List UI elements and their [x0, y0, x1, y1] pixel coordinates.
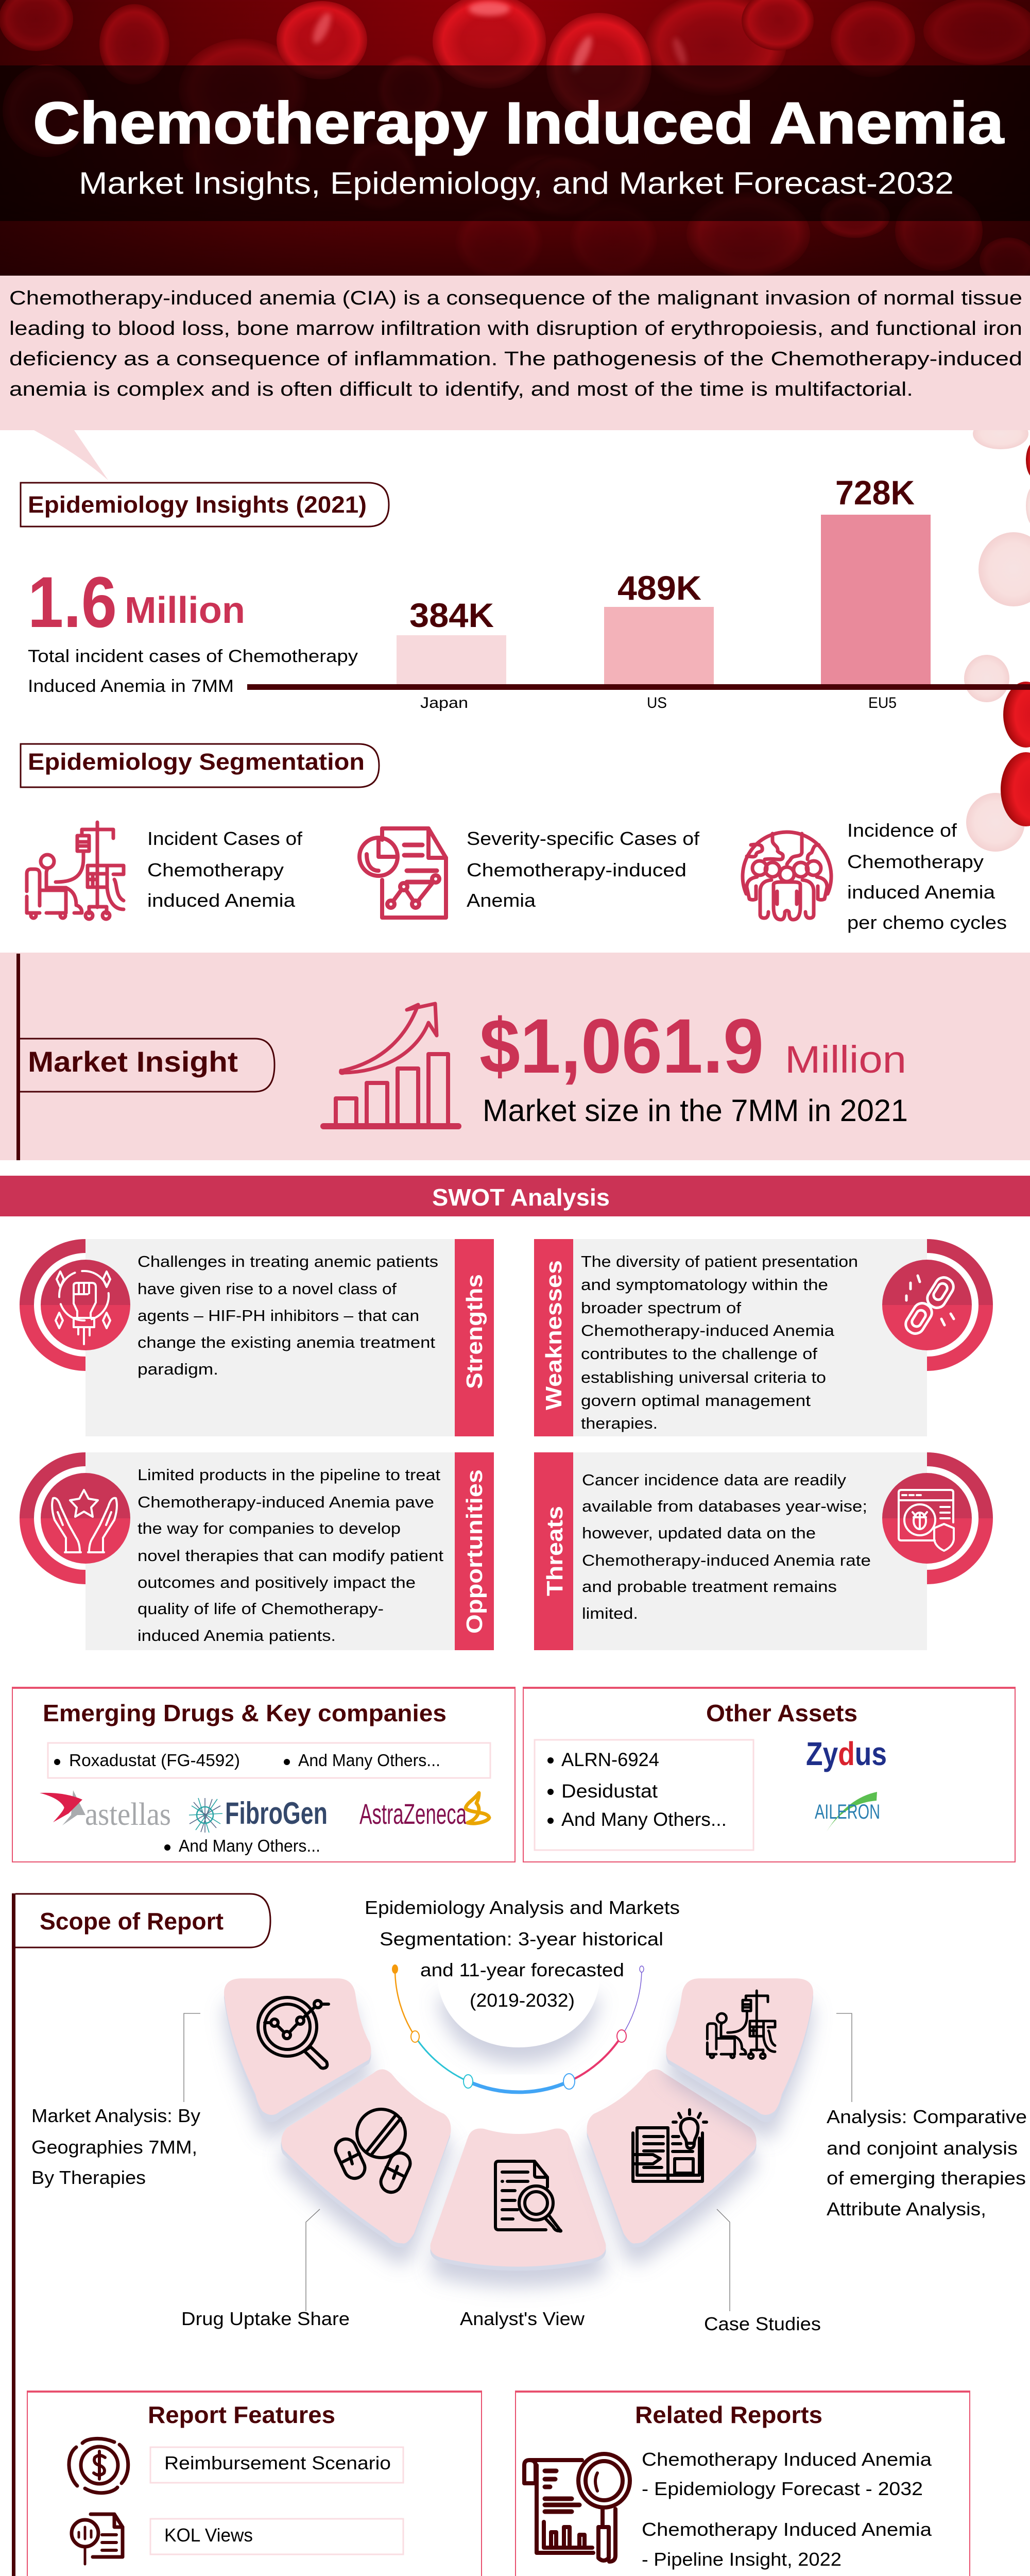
strengths text: Challenges in treating anemic patients: [138, 1252, 438, 1270]
drug list box: Roxadustat (FG-4592): [69, 1751, 240, 1770]
segment: severity-specific: [359, 828, 700, 918]
panel: market insight: Market size in the 7MM in 2021: [483, 1093, 908, 1128]
text: epidemiology analysis: Epidemiology Analysis and Markets: [365, 1897, 680, 1918]
weaknesses text: contributes to the challenge of: [581, 1345, 817, 1363]
panel: opportunities: Opportunities: [462, 1469, 487, 1634]
market size value: $1,061.9: [479, 1003, 764, 1089]
strengths text: paradigm.: [138, 1360, 218, 1378]
text: market analysis: By Therapies: [31, 2167, 146, 2188]
weaknesses text: The diversity of patient presentation: [581, 1252, 858, 1270]
dark title band: [0, 65, 1030, 221]
related report titles: - Pipeline Insight, 2022: [642, 2549, 842, 2570]
intro text: deficiency as a consequence of inflammation. The pathogenesis of the Chemotherapy-induced: [9, 348, 1022, 370]
heading: Related Reports: [635, 2401, 822, 2428]
text: drug uptake share: Drug Uptake Share: [181, 2308, 350, 2329]
opportunities text: Limited products in the pipeline to treat: [138, 1466, 440, 1484]
segment: incidence per chemo cycles: Incidence of: [847, 820, 957, 841]
related report titles: Chemotherapy Induced Anemia: [642, 2449, 932, 2470]
text: market analysis: [31, 2105, 200, 2188]
segment: severity-specific: Chemotherapy-induced: [467, 859, 686, 880]
segment: incident cases: [27, 822, 303, 919]
KOL box: KOL Views: [164, 2524, 253, 2546]
panel: weaknesses: [534, 1239, 993, 1436]
connector lines: [184, 2013, 852, 2311]
text: comparative analysis: Attribute Analysis,: [827, 2198, 986, 2219]
text: market analysis: Geographies 7MM,: [31, 2137, 197, 2158]
logo: FibroGen: [189, 1796, 328, 1833]
icon: book with lightbulb: [633, 2110, 707, 2181]
heading: Report Features: [148, 2401, 335, 2428]
stat: 1.6 Million: [28, 562, 358, 696]
text: epidemiology analysis: Segmentation: 3-year historical: [380, 1928, 663, 1950]
weaknesses text: and symptomatology within the: [581, 1276, 828, 1294]
text: market analysis: Market Analysis: By: [31, 2105, 200, 2126]
petal: comparative analysis: [666, 1978, 813, 2122]
segment: incident cases: induced Anemia: [147, 890, 296, 911]
opportunities text: Chemotherapy-induced Anemia pave: [138, 1493, 434, 1511]
icon: computer bug and shield: [899, 1490, 954, 1551]
icon: chemo chair and IV: [706, 1990, 777, 2060]
intro text: [9, 287, 1022, 400]
petal: market analysis: [224, 1978, 371, 2122]
icon: fist: [56, 1271, 110, 1344]
weaknesses text: govern optimal management: [581, 1392, 811, 1410]
text: epidemiology analysis: (2019-2032): [470, 1990, 575, 2011]
segment: severity-specific: Severity-specific Cases of: [467, 828, 700, 849]
logo: FibroGen: FibroGen: [225, 1796, 328, 1831]
bar chart: 489K: [617, 569, 701, 607]
text: comparative analysis: Analysis: Comparative: [827, 2106, 1027, 2127]
opportunities text: induced Anemia patients.: [138, 1626, 336, 1645]
logo: astellas: astellas: [85, 1797, 171, 1832]
icon: pills: [332, 2109, 414, 2196]
weaknesses text: therapies.: [581, 1414, 658, 1432]
text: comparative analysis: of emerging therapies: [827, 2167, 1026, 2189]
panel: strengths: Strengths: [462, 1274, 487, 1389]
panel: related reports: [515, 2391, 970, 2576]
related report titles: Chemotherapy Induced Anemia: [642, 2519, 932, 2540]
logo: AstraZeneca: AstraZeneca: [359, 1798, 467, 1830]
icon: chemo chair and IV: [25, 820, 126, 921]
reimbursement box: [150, 2447, 403, 2483]
assets list box: And Many Others...: [561, 1809, 727, 1830]
threats text: Cancer incidence data are readily: [582, 1471, 847, 1489]
heading: Emerging Drugs & Key companies: [43, 1700, 447, 1726]
related report titles: [642, 2449, 932, 2570]
bar chart: EU5: [868, 694, 897, 711]
stat: 1.6 Million: Million: [125, 590, 245, 631]
assets list box: ALRN-6924: [561, 1749, 659, 1770]
icon: dollar cycle: [69, 2438, 128, 2493]
logo: astellas: [40, 1790, 171, 1832]
icon: magnifier with chart: [258, 1997, 329, 2068]
stat: 1.6 Million: Induced Anemia in 7MM: [28, 676, 234, 696]
threats text: and probable treatment remains: [582, 1578, 837, 1596]
panel: threats: Threats: [542, 1506, 568, 1596]
segment: incidence per chemo cycles: induced Anemia: [847, 882, 995, 903]
opportunities text: [138, 1466, 443, 1645]
panel: emerging drugs and key companies: [12, 1687, 516, 1862]
title: Chemotherapy Induced Anemia: [33, 91, 1005, 156]
opportunities text: outcomes and positively impact the: [138, 1573, 416, 1591]
bar chart: 384K: [409, 596, 494, 634]
SWOT heading bar: SWOT Analysis: [432, 1184, 610, 1211]
icon: hands holding star: [52, 1490, 117, 1552]
stat: 1.6 Million: Total incident cases of Chemotherapy: [28, 647, 358, 666]
heading: Scope of Report: [15, 1894, 270, 1947]
heading: Other Assets: [706, 1700, 857, 1726]
weaknesses text: establishing universal criteria to: [581, 1368, 826, 1386]
segment: incidence per chemo cycles: [743, 820, 1007, 933]
panel: threats: [534, 1452, 993, 1650]
decorative blood cells on right edge: [964, 418, 1030, 852]
segment: incident cases: Chemotherapy: [147, 859, 284, 880]
strengths text: change the existing anemia treatment: [138, 1333, 435, 1351]
heading: Epidemiology Insights: Epidemiology Insights (2021): [28, 492, 367, 518]
text: epidemiology analysis: [365, 1897, 680, 2011]
threats text: however, updated data on the: [582, 1524, 816, 1542]
bar chart: Japan: [420, 694, 468, 711]
threats text: [582, 1471, 871, 1622]
heading: Epidemiology Segmentation: [21, 744, 379, 787]
segment: incident cases: Incident Cases of: [147, 828, 303, 849]
segment: incidence per chemo cycles: Chemotherapy: [847, 851, 984, 872]
panel: market insight: Million: [785, 1038, 906, 1081]
text: comparative analysis: [827, 2106, 1027, 2219]
strengths text: [138, 1252, 438, 1378]
logo: Aileron: [815, 1792, 880, 1832]
heading: Market Insight: Market Insight: [28, 1045, 238, 1078]
scope diagram: [184, 1964, 852, 2311]
panel: strengths: [20, 1239, 494, 1436]
drug list box: And Many Others...: [298, 1751, 440, 1770]
assets list box: [535, 1740, 753, 1850]
intro text: Chemotherapy-induced anemia (CIA) is a consequence of the malignant invasion of normal tissue: [9, 287, 1022, 309]
drug list box: [48, 1743, 490, 1778]
petal: case studies: [587, 2069, 757, 2248]
more companies: And Many Others...: [179, 1836, 320, 1855]
threats text: limited.: [582, 1604, 638, 1622]
opportunities text: quality of life of Chemotherapy-: [138, 1600, 384, 1618]
bar chart: 728K: [835, 473, 915, 512]
petal: analyst's view: [431, 2128, 606, 2271]
intro panel: [0, 276, 1030, 480]
threats text: Chemotherapy-induced Anemia rate: [582, 1551, 871, 1569]
strengths text: have given rise to a novel class of: [138, 1280, 397, 1298]
text: case studies: Case Studies: [704, 2313, 821, 2334]
center half disc: [437, 1980, 600, 2047]
stat: 1.6 Million: 1.6: [28, 562, 117, 642]
panel: report features: [27, 2391, 482, 2576]
subtitle: Market Insights, Epidemiology, and Market Forecast-2032: [79, 166, 954, 200]
heading: Epidemiology Segmentation: Epidemiology Segmentation: [28, 749, 365, 775]
opportunities text: the way for companies to develop: [138, 1519, 401, 1537]
panel: market insight: [0, 953, 1030, 1160]
hero banner with red blood cells: [0, 0, 1030, 284]
reimbursement box: Reimbursement Scenario: [164, 2452, 391, 2473]
text: comparative analysis: and conjoint analysis: [827, 2138, 1018, 2159]
logo: Aileron: AILERON: [815, 1801, 880, 1823]
icon: document magnifier: [495, 2161, 561, 2231]
icon: document with chart: [359, 828, 446, 918]
icon: rising bars with arrow: [323, 1004, 458, 1126]
heading: Scope of Report: Scope of Report: [40, 1908, 224, 1935]
related report titles: - Epidemiology Forecast - 2032: [642, 2478, 923, 2499]
threats text: available from databases year-wise;: [582, 1497, 867, 1515]
timeline arc: [392, 1964, 644, 2092]
icon: broken chain: [902, 1274, 957, 1337]
heading: Epidemiology Insights: [21, 483, 389, 527]
scope of report section rail: [12, 1893, 15, 2576]
icon: magnified report: [72, 2514, 123, 2564]
icon: globe and people: [743, 832, 831, 920]
icon: report scroll and magnifier: [524, 2454, 630, 2562]
SWOT heading bar: [0, 1176, 1030, 1216]
petal: drug uptake: [281, 2069, 451, 2248]
panel: weaknesses: Weaknesses: [541, 1260, 566, 1410]
bar chart: US: [647, 694, 667, 711]
bar chart: [247, 473, 1030, 711]
KOL box: [150, 2519, 403, 2554]
weaknesses text: Chemotherapy-induced Anemia: [581, 1321, 835, 1340]
assets list box: Desidustat: [561, 1781, 658, 1802]
weaknesses text: broader spectrum of: [581, 1299, 741, 1317]
panel: opportunities: [20, 1452, 494, 1650]
text: epidemiology analysis: and 11-year forecasted: [420, 1959, 624, 1980]
logo: Zydus: Zydus: [806, 1735, 887, 1772]
weaknesses text: [581, 1252, 858, 1432]
intro text: leading to blood loss, bone marrow infiltration with disruption of erythropoiesis, and functional iron: [9, 318, 1022, 340]
panel: other assets: [523, 1687, 1016, 1862]
opportunities text: novel therapies that can modify patient: [138, 1547, 443, 1565]
heading: Market Insight: [20, 1039, 274, 1092]
text: analyst's view: Analyst's View: [460, 2308, 585, 2329]
intro text: anemia is complex and is often difficult to identify, and most of the time is multifactorial.: [9, 379, 913, 400]
segment: incidence per chemo cycles: per chemo cycles: [847, 912, 1007, 933]
strengths text: agents – HIF-PH inhibitors – that can: [138, 1307, 419, 1325]
segment: severity-specific: Anemia: [467, 890, 536, 911]
